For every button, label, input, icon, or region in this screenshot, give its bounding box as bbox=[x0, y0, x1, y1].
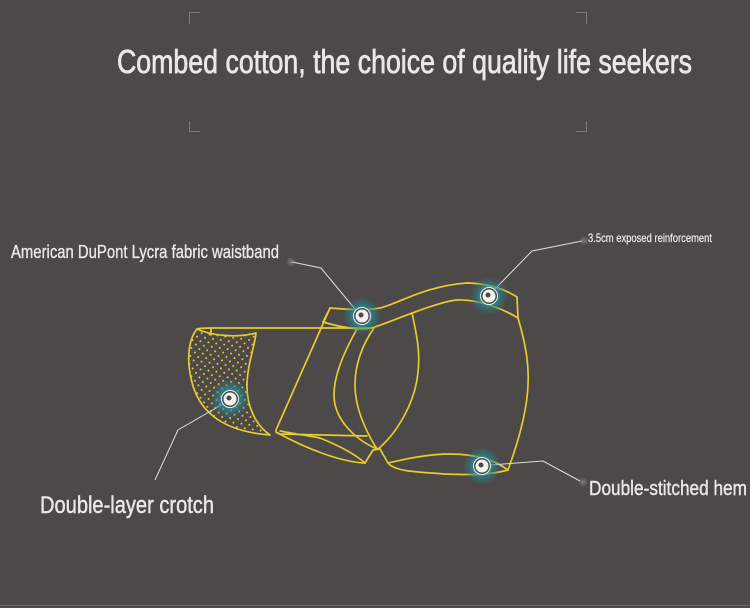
title frame corners bbox=[190, 12, 586, 132]
marker bbox=[470, 277, 508, 315]
marker bbox=[343, 297, 381, 335]
marker bbox=[463, 447, 501, 485]
label: 3.5cm exposed reinforcement bbox=[588, 231, 713, 245]
front body bbox=[276, 308, 419, 463]
callout: hem bbox=[463, 447, 747, 500]
crotch panel with dots bbox=[189, 328, 370, 435]
leader line bbox=[490, 461, 580, 481]
waistband bbox=[323, 283, 518, 329]
leader line bbox=[155, 404, 223, 480]
callout: crotch bbox=[40, 379, 250, 519]
callout: waistband bbox=[11, 242, 381, 335]
leader line bbox=[495, 241, 582, 289]
label: Double-layer crotch bbox=[40, 492, 214, 519]
text glow bbox=[286, 257, 296, 267]
bottom edge line bbox=[0, 605, 750, 606]
leg hem and side seam bbox=[388, 318, 528, 475]
leader line bbox=[292, 262, 355, 309]
marker bbox=[210, 379, 250, 419]
callout: reinforcement bbox=[470, 231, 713, 315]
text glow bbox=[578, 477, 588, 487]
text glow bbox=[579, 236, 589, 246]
garment line drawing bbox=[189, 283, 528, 475]
label: American DuPont Lycra fabric waistband bbox=[11, 242, 279, 262]
